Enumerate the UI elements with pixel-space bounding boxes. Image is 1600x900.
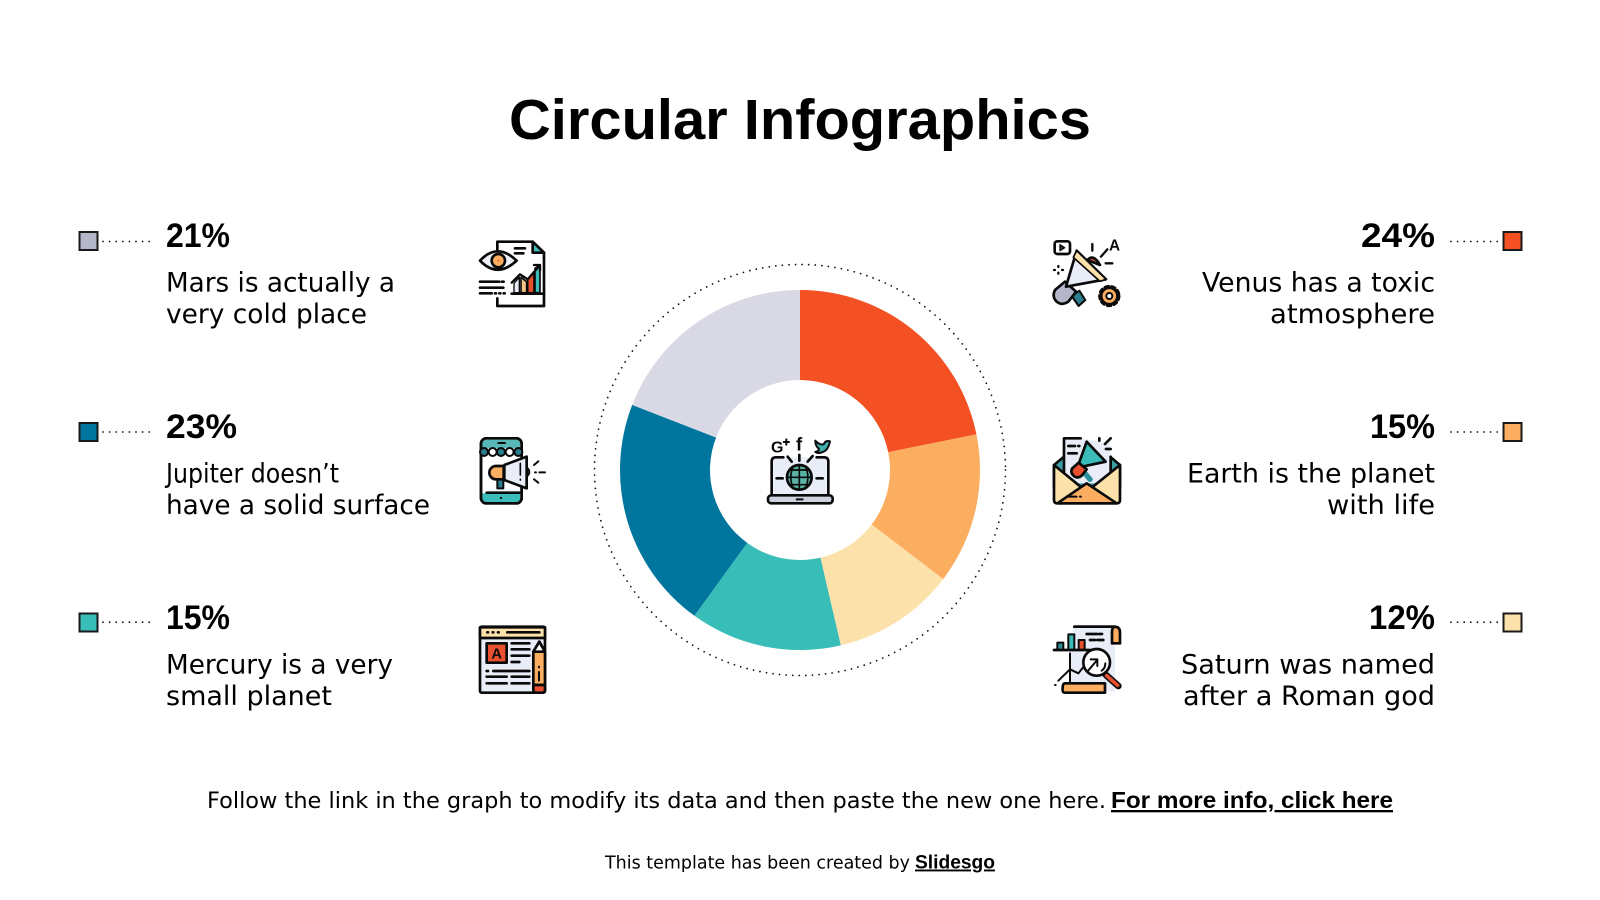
icon: web page with pencil: A [491, 647, 502, 663]
value: 24% [1361, 217, 1435, 255]
description [1181, 650, 1435, 712]
description [166, 650, 393, 712]
description [1202, 268, 1435, 330]
icon: envelope with megaphone [1054, 438, 1120, 503]
panel: Mercury [80, 599, 545, 712]
value: 15% [1370, 408, 1435, 446]
segment: Earth 15% [872, 434, 980, 579]
description: Earth is the planet [1187, 458, 1435, 490]
description: small planet [166, 681, 332, 712]
panel: Earth [1054, 408, 1522, 521]
value: 12% [1369, 599, 1435, 637]
legend swatch and leader [1451, 614, 1522, 632]
legend swatch and leader [80, 232, 151, 250]
description: Mercury is a very [166, 650, 393, 680]
legend swatch and leader [80, 614, 151, 632]
description: with life [1327, 490, 1435, 521]
icon: report with magnifier [1054, 627, 1120, 693]
description: Saturn was named [1181, 650, 1435, 680]
description: after a Roman god [1183, 681, 1435, 712]
dotted ring [594, 264, 1006, 676]
segment: Saturn 12% [820, 525, 943, 645]
description: atmosphere [1270, 299, 1435, 330]
description: very cold place [166, 299, 367, 330]
legend swatch and leader [80, 423, 151, 441]
description: have a solid surface [166, 490, 430, 521]
icon: laptop with social networks: f [796, 434, 803, 455]
panel: Venus [1054, 217, 1522, 330]
icon: web page with pencil [480, 627, 545, 693]
value: 21% [166, 217, 230, 255]
description: Jupiter doesn’t [164, 458, 339, 490]
footnote: Follow the link in the graph to modify its data and then paste the new one here. [207, 789, 1106, 814]
icon: document with eye and chart [480, 242, 544, 306]
legend swatch and leader [1451, 423, 1522, 441]
value: 23% [166, 408, 237, 446]
footnote [207, 787, 1393, 814]
panel: Jupiter [80, 408, 545, 521]
icon: megaphone with gear [1054, 238, 1120, 306]
donut chart [594, 264, 1006, 676]
panel: Mars [80, 217, 544, 330]
credit line: This template has been created by [604, 854, 910, 874]
segment: Mars 21% [632, 290, 800, 437]
title: Circular Infographics [509, 88, 1091, 152]
description: Venus has a toxic [1202, 268, 1435, 298]
icon: laptop with social networks: G [771, 440, 783, 457]
credit link: Slidesgo [915, 852, 995, 874]
segment: Mercury 15% [694, 543, 841, 650]
legend swatch and leader [1451, 232, 1522, 250]
segment: Jupiter 23% [620, 405, 747, 616]
description [1187, 458, 1435, 521]
value: 15% [166, 599, 230, 637]
link: For more info, click here [1111, 787, 1393, 813]
icon: phone with megaphone [480, 438, 545, 503]
description: Mars is actually a [166, 268, 395, 298]
description [164, 458, 430, 521]
icon: megaphone with gear: A [1109, 238, 1120, 255]
segment: Venus 24% [800, 290, 976, 452]
description [166, 268, 395, 330]
icon: laptop with social networks [768, 434, 833, 503]
panel: Saturn [1054, 599, 1522, 712]
